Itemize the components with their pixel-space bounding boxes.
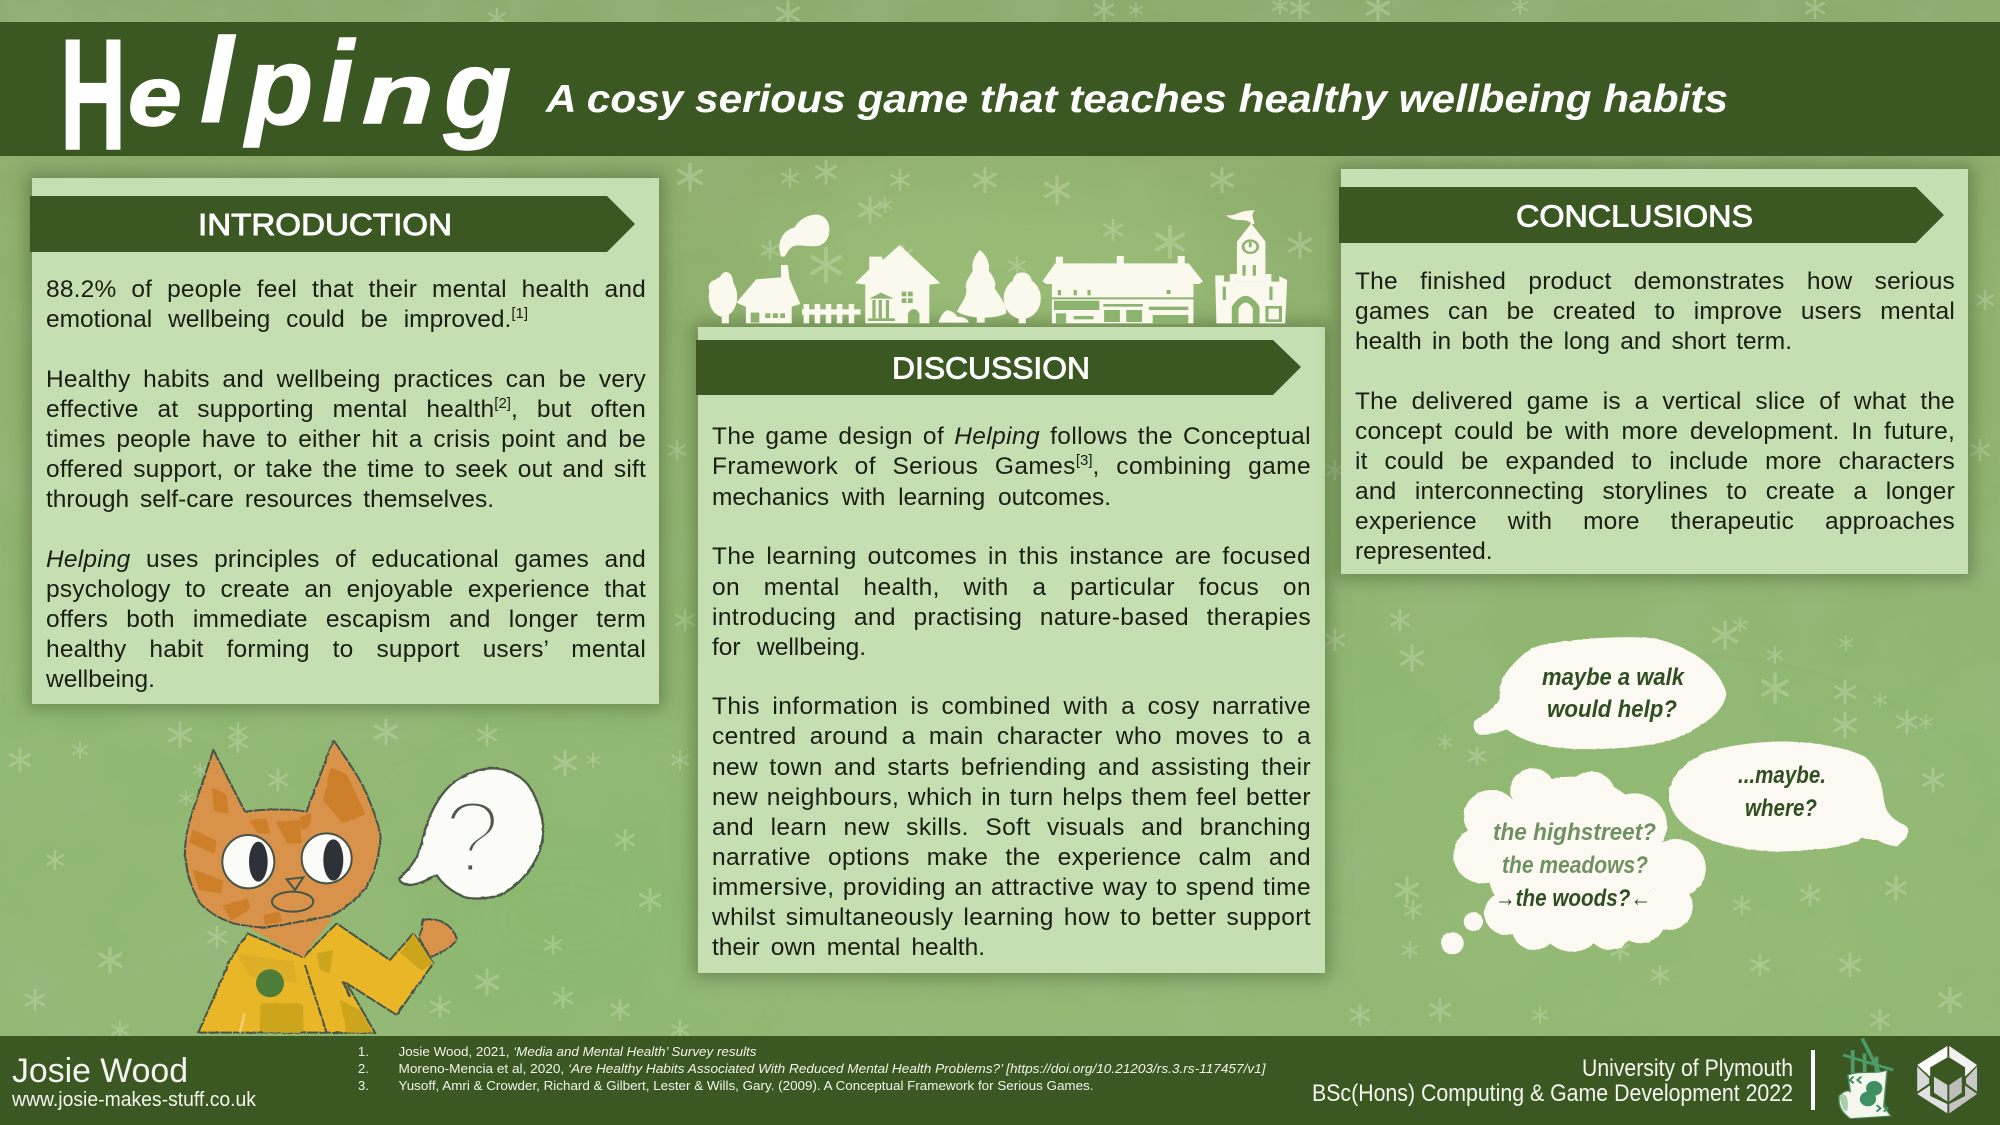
footer: references: Yusoff, Amri & Crowder, Richard & Gilbert, Lester & Wills, Gary. (2009). A Conceptual Framework for Serious Games.: [398, 1078, 1094, 1093]
cat speech bubble with question mark: ?: [443, 779, 501, 895]
heading: introduction: INTRODUCTION: [198, 207, 452, 242]
title: Helping: p: [246, 25, 313, 148]
footer: author: Josie Wood: [12, 1052, 188, 1090]
text block: conclusions body: games can be created to improve users mental: [1355, 298, 1955, 324]
title: Helping: i: [322, 19, 354, 146]
text block: introduction body: times people have to either hit a crisis point and be: [46, 426, 646, 452]
bubble: ...maybe. where?: [1738, 762, 1826, 822]
text block: introduction body: offers both immediate escapism and longer term: [46, 606, 646, 632]
illustration: clock tower: [1215, 210, 1287, 323]
text block: discussion body: Framework of Serious Games[3], combining game: [712, 452, 1311, 480]
cat head: [185, 740, 381, 927]
bubble: location options: →the woods?←: [1495, 885, 1651, 912]
footer: author: www.josie-makes-stuff.co.uk: [11, 1089, 257, 1111]
text block: introduction body: offered support, or take the time to seek out and sift: [46, 456, 646, 482]
text block: introduction body: psychology to create an enjoyable experience that: [46, 576, 646, 602]
title: Helping: g: [444, 28, 511, 151]
footer bar: [0, 1036, 2000, 1125]
title: Helping: n: [362, 47, 434, 141]
title banner: [0, 22, 2000, 156]
bubble: location options: [1493, 819, 1656, 912]
text block: introduction body: wellbeing.: [46, 666, 155, 692]
cat mouth: [272, 877, 313, 912]
bubble: maybe a walk would help?: would help?: [1547, 696, 1677, 723]
footer: university and course: University of Plymouth: [1582, 1055, 1793, 1082]
text block: introduction body: healthy habit forming to support users’ mental: [46, 636, 646, 662]
text block: conclusions body: represented.: [1355, 538, 1493, 564]
text block: discussion body: immersive, providing an attractive way to spend time: [712, 874, 1311, 900]
illustration: house: [855, 245, 940, 323]
text block: conclusions body: concept could be with more development. In future,: [1355, 418, 1955, 444]
footer: references: 1.: [358, 1044, 369, 1059]
cat speech bubble with question mark: [399, 768, 543, 899]
footer: references: Josie Wood, 2021, ‘Media and Mental Health’ Survey results: [398, 1044, 757, 1059]
heading: introduction: [30, 196, 635, 252]
text block: discussion body: [712, 423, 1311, 960]
cat eyes: [222, 833, 352, 888]
illustration: chimney smoke: [779, 215, 829, 257]
text block: conclusions body: The finished product demonstrates how serious: [1355, 268, 1955, 294]
footer: university and course: BSc(Hons) Computing & Game Development 2022: [1312, 1080, 1793, 1107]
text block: introduction body: 88.2% of people feel that their mental health and: [46, 276, 646, 302]
bubble: location options: the highstreet?: [1493, 819, 1656, 846]
text block: introduction body: through self-care resources themselves.: [46, 486, 494, 512]
bubble shapes: [1441, 637, 1908, 954]
heading: conclusions: CONCLUSIONS: [1516, 199, 1753, 234]
text block: discussion body: narrative options make the experience calm and: [712, 844, 1311, 870]
illustration: fence: [802, 304, 861, 323]
text block: introduction body: [46, 276, 646, 692]
text block: discussion body: on mental health, with a particular focus on: [712, 574, 1311, 600]
cat coat button: [256, 969, 284, 997]
heading: discussion: DISCUSSION: [892, 350, 1090, 386]
panel: conclusions: [1341, 169, 1968, 574]
illustration: round tree: [709, 272, 737, 323]
text block: conclusions body: and interconnecting storylines to create a longer: [1355, 478, 1955, 504]
text block: introduction body: Helping uses principles of educational games and: [46, 546, 646, 572]
text block: conclusions body: experience with more therapeutic approaches: [1355, 508, 1955, 534]
text block: discussion body: new town and starts befriending and assisting their: [712, 754, 1311, 780]
text block: discussion body: The game design of Helping follows the Conceptual: [712, 423, 1311, 450]
bubble: location options: the meadows?: [1502, 852, 1648, 879]
text block: discussion body: introducing and practising nature-based therapies: [712, 604, 1311, 630]
illustration: long building: [1042, 256, 1203, 323]
text block: introduction body: Healthy habits and wellbeing practices can be very: [46, 366, 646, 393]
panel: introduction: [32, 178, 659, 704]
panel: discussion: [698, 327, 1325, 973]
text block: conclusions body: health in both the long and short term.: [1355, 328, 1792, 354]
footer: references: 2.: [358, 1061, 369, 1076]
title: Helping: l: [200, 14, 233, 148]
bubble: maybe a walk would help?: [1542, 664, 1686, 723]
subtitle: A cosy serious game that teaches healthy wellbeing habits: [545, 78, 1728, 121]
cat body: [198, 917, 457, 1033]
text block: discussion body: their own mental health.: [712, 934, 985, 960]
text block: discussion body: and learn new skills. Soft visuals and branching: [712, 814, 1311, 840]
illustration: pine tree: [957, 250, 1006, 323]
text block: discussion body: centred around a main character who moves to a: [712, 723, 1311, 750]
illustration: cottage: [736, 265, 800, 323]
illustration: tree: [1004, 272, 1041, 323]
bubble: ...maybe. where?: where?: [1745, 795, 1817, 822]
text block: discussion body: new neighbours, which in turn helps them feel better: [712, 784, 1311, 810]
heading: discussion: [696, 340, 1301, 395]
text block: introduction body: effective at supporting mental health[2], but often: [46, 394, 646, 422]
heading: conclusions: [1339, 187, 1944, 243]
illustration: town skyline: [708, 210, 1288, 324]
footer: references: 3.: [358, 1078, 369, 1093]
text block: discussion body: whilst simultaneously learning how to better support: [712, 904, 1311, 930]
text block: discussion body: This information is combined with a cosy narrative: [712, 693, 1311, 720]
text block: introduction body: emotional wellbeing could be improved.[1]: [46, 304, 528, 332]
text block: discussion body: mechanics with learning outcomes.: [712, 484, 1111, 510]
title: Helping: e: [128, 49, 182, 143]
text block: conclusions body: [1355, 268, 1955, 564]
text block: conclusions body: The delivered game is a vertical slice of what the: [1355, 388, 1955, 414]
text block: conclusions body: it could be expanded to include more characters: [1355, 448, 1955, 474]
bubble: maybe a walk would help?: maybe a walk: [1542, 664, 1686, 691]
illustration: bush: [938, 310, 969, 323]
text block: discussion body: The learning outcomes in this instance are focused: [712, 543, 1311, 570]
text block: discussion body: for wellbeing.: [712, 634, 866, 660]
bubble: ...maybe. where?: ...maybe.: [1738, 762, 1826, 789]
title: Helping: H: [60, 7, 126, 183]
footer: references: Moreno-Mencia et al, 2020, ‘Are Healthy Habits Associated With Reduced Mental Health Problems?’ [https://doi.org/10.21203/rs.3.rs-117457/v1]: [398, 1061, 1266, 1076]
title: Helping: [60, 7, 511, 183]
